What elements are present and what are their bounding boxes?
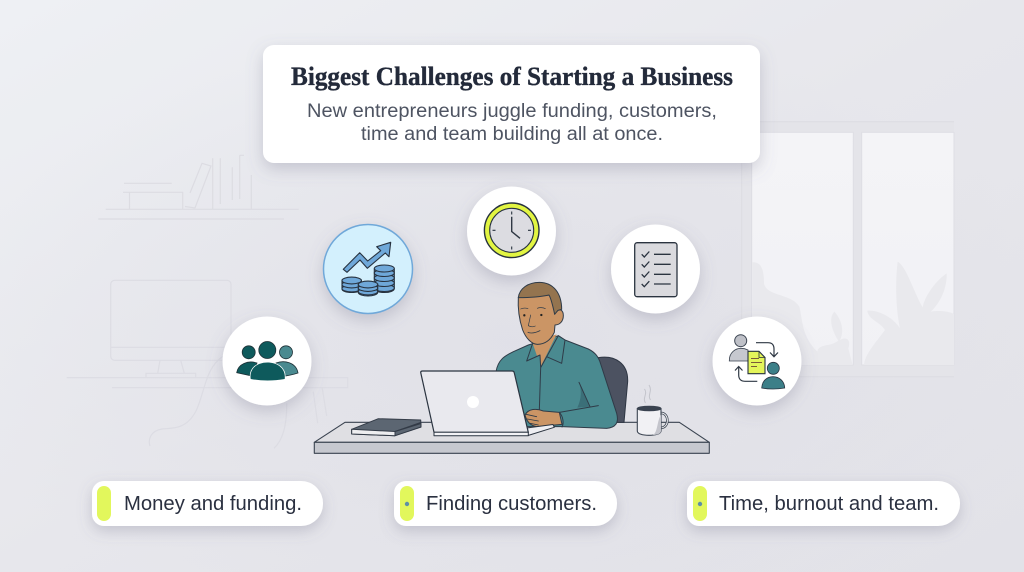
sleeve shadow	[577, 382, 589, 408]
hair	[518, 282, 562, 314]
icon: clock	[467, 186, 556, 276]
icon: team of people	[222, 316, 312, 406]
person at laptop	[496, 282, 617, 428]
hand and cuff	[525, 409, 562, 427]
icon: rising coins chart	[324, 224, 412, 314]
label: time, burnout and team	[687, 481, 960, 526]
title: Biggest Challenges of Starting a Business	[291, 62, 733, 91]
eyes, nose and mouth	[521, 308, 545, 333]
label: finding customers: Finding customers.	[426, 493, 597, 515]
background: desk and monitor line art	[67, 280, 348, 448]
steam	[644, 385, 650, 403]
coffee mug	[637, 385, 667, 435]
subtitle: time and team building all at once.	[361, 124, 663, 145]
label: finding customers	[394, 481, 617, 526]
trend arrow	[343, 242, 391, 272]
icon: team handoff	[712, 316, 802, 406]
icon: checklist	[611, 224, 700, 314]
label: money and funding	[92, 481, 323, 526]
label: money and funding: Money and funding.	[124, 493, 302, 515]
label: time, burnout and team: Time, burnout and team.	[719, 493, 939, 515]
laptop logo	[467, 396, 479, 408]
background: window with plants	[742, 122, 954, 377]
background: bookshelf line art	[98, 155, 299, 219]
chair	[598, 357, 628, 422]
neck and face	[533, 334, 557, 367]
coin stacks	[342, 265, 394, 296]
shirt	[496, 336, 617, 428]
subtitle: New entrepreneurs juggle funding, customers,	[307, 101, 717, 122]
desk	[314, 422, 709, 453]
title card	[263, 45, 760, 163]
book	[352, 419, 421, 436]
collar and placket	[527, 336, 565, 410]
laptop	[421, 371, 554, 436]
subtitle	[307, 101, 717, 145]
